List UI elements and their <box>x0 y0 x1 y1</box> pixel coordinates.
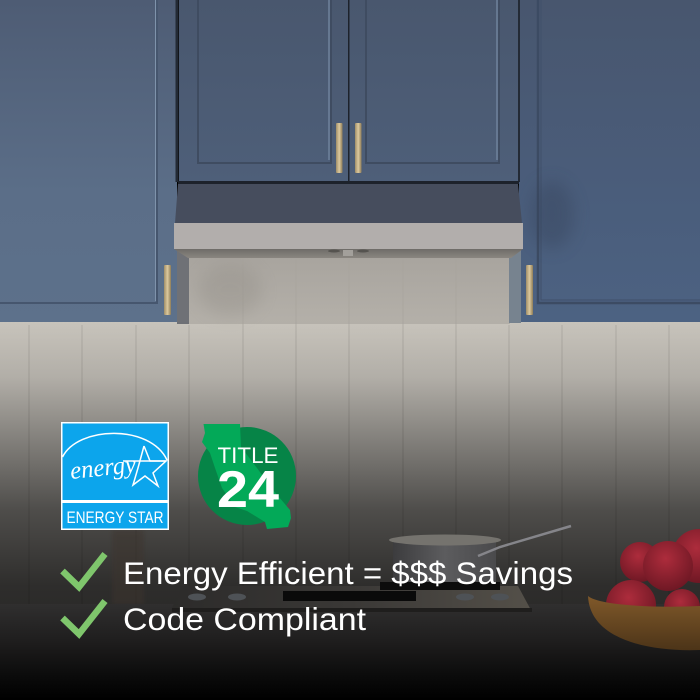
blurred vase on left <box>112 530 144 605</box>
TITLE text: TITLE <box>218 443 278 468</box>
energy script: energy <box>69 451 138 485</box>
icon: check mark <box>62 601 105 634</box>
right wall cabinet <box>509 0 700 323</box>
benefit text: Code Compliant <box>123 601 366 637</box>
saucepan <box>380 526 571 590</box>
checklist item: energy efficient <box>62 554 573 591</box>
tiled wall <box>0 256 700 612</box>
24 text: 24 <box>217 461 279 519</box>
cabinet handles <box>164 123 533 315</box>
checklist item: code compliant <box>62 601 366 637</box>
range hood <box>174 184 523 258</box>
arc and star <box>62 433 167 486</box>
dark gradient overlay <box>0 320 700 700</box>
Energy Star logo <box>61 422 169 530</box>
benefit text: Energy Efficient = $$$ Savings <box>123 555 573 591</box>
left wall cabinet <box>0 0 189 324</box>
countertop <box>0 604 700 700</box>
upper centre cabinet doors <box>178 0 519 184</box>
ENERGY STAR label: ENERGY STAR <box>66 508 164 527</box>
Title 24 badge <box>198 424 296 529</box>
icon: check mark <box>62 554 105 587</box>
cooktop <box>170 586 532 612</box>
bowl of apples <box>588 529 700 650</box>
